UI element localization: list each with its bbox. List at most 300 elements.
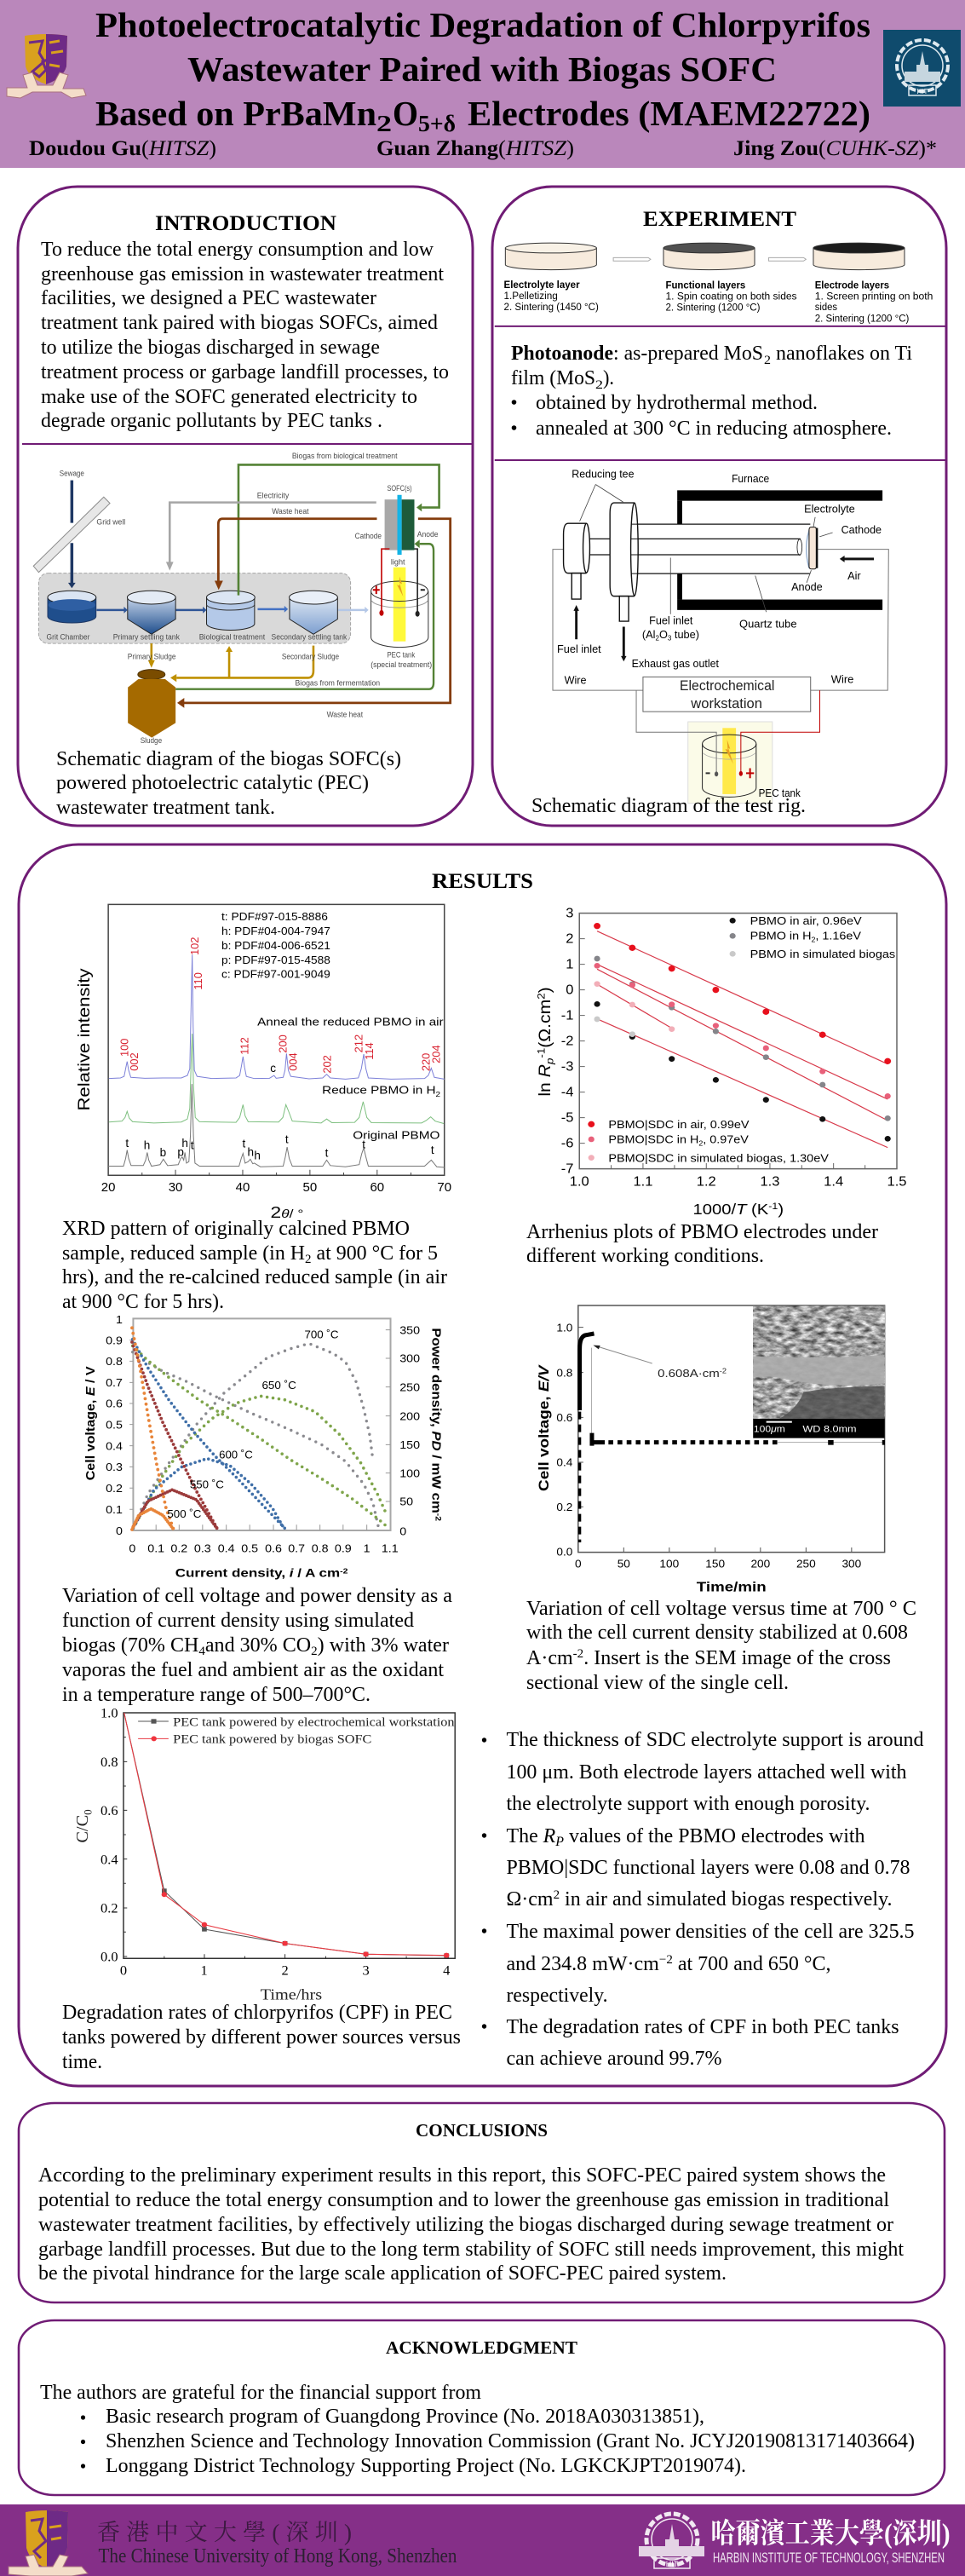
axis labels: 0.8 [556, 1367, 572, 1379]
chart: cell voltage versus time: 150 [705, 1558, 725, 1570]
axis labels: 70 [437, 1180, 451, 1195]
icon: HIT logo footer [639, 2514, 704, 2568]
caption: test rig: Schematic diagram of the test rig. [531, 795, 806, 817]
bottom axis labels: 0.5 [241, 1542, 258, 1555]
axis labels: 0.6 [556, 1411, 572, 1424]
title: Wastewater Paired with Biogas SOFC [187, 49, 777, 89]
phase letters: t [125, 1137, 129, 1150]
legend: upper: 2 [812, 936, 816, 943]
axis labels: 0.6 [101, 1804, 118, 1818]
rig labels: Reducing tee [572, 468, 635, 481]
step text: electrolyte layer: Electrolyte layer [504, 280, 580, 291]
legend: PEC tank powered by electrochemical workstation [173, 1715, 455, 1729]
text block: conclusions: garbage landfill processes. But due to the long term stability of SOFC still needs improvement, this might [38, 2239, 904, 2261]
text block: photoanode: 2 [764, 354, 771, 367]
legend: upper: PBMO in air, 0.96eV [750, 914, 862, 927]
rig labels: O [659, 629, 668, 642]
diagram labels: Cathode [355, 532, 382, 540]
caption: degradation rates: tanks powered by different power sources versus [62, 2026, 461, 2049]
phase letters [125, 1062, 434, 1162]
chart: Arrhenius plots: 1.0 [570, 1175, 589, 1189]
rig labels: Fuel inlet [649, 614, 693, 627]
diagram labels: (special treatment) [370, 660, 432, 669]
caption: degradation rates: time. [62, 2051, 102, 2073]
bottom axis labels: 0.4 [218, 1542, 235, 1555]
diagram labels: Waste heat [327, 711, 364, 719]
text block: results bullet list: 100 μm. Both electrode layers attached well with [506, 1761, 906, 1784]
caption: schematic diagram of PEC system: wastewater treatment tank. [56, 797, 275, 819]
axis title: cell voltage: Cell voltage, E/V [537, 1364, 552, 1491]
series: PBMO in air [594, 1001, 891, 1142]
curves: 550 C [132, 1342, 218, 1530]
sludge tank [128, 670, 175, 738]
author: Guan Zhang [376, 137, 574, 160]
left axis labels: 0.2 [106, 1481, 123, 1495]
chart: degradation rates: 3 [362, 1964, 370, 1978]
chart: cell voltage versus time: 300 [842, 1558, 861, 1570]
text block: photoanode: film (MoS [511, 367, 595, 389]
temperature labels: 550 ˚C [190, 1478, 224, 1491]
bottom axis labels: 1.1 [382, 1542, 399, 1555]
author: Guan Zhang: (HITSZ) [498, 137, 574, 160]
step text: electrolyte layer: 2. Sintering (1450 °C) [504, 303, 599, 314]
text block: photoanode: ). [603, 367, 614, 389]
text block: results bullet list: the electrolyte support with enough porosity. [506, 1793, 870, 1815]
left axis labels [106, 1312, 123, 1537]
electrochemical workstation [643, 677, 811, 712]
axis title: cell voltage: Cell voltage, E / V [84, 1366, 98, 1480]
panel: conclusions [19, 2103, 945, 2302]
text block: results bullet list: 2 [554, 1888, 560, 1902]
axis labels: 0.4 [556, 1456, 572, 1469]
legend: upper: PBMO in simulated biogas [750, 948, 895, 960]
heading: acknowledgment: ACKNOWLEDGMENT [386, 2337, 577, 2358]
PEC tank schematic [636, 690, 819, 804]
axis labels: 0 [566, 983, 574, 998]
text block: introduction: make use of the SOFC generated electricity to [41, 386, 417, 408]
text: CUHK Shenzhen English name: The Chinese University of Hong Kong, Shenzhen [99, 2545, 457, 2567]
temperature labels: 650 ˚C [261, 1379, 296, 1392]
chart: Arrhenius plots: 1.1 [633, 1175, 653, 1189]
bottom axis labels: 0.9 [335, 1542, 352, 1555]
text block: conclusions: According to the preliminary experiment results in this report, this SOFC-PEC paired system shows the [38, 2164, 886, 2187]
caption: cell voltage and power density: vaporas the fuel and ambient air as the oxidant [62, 1659, 444, 1681]
chart: Arrhenius plots: 1.4 [824, 1175, 843, 1189]
curves: 500 C [132, 1328, 174, 1530]
caption: XRD pattern: at 900 °C for 5 hrs). [62, 1291, 224, 1313]
right axis labels: 350 [399, 1323, 420, 1336]
curve: original [108, 1084, 445, 1167]
temperature labels: 600 ˚C [219, 1449, 253, 1461]
axis title: C/C0: C/C [74, 1818, 92, 1843]
caption: XRD pattern [62, 1218, 447, 1313]
diagram labels: SOFC(s) [388, 484, 412, 493]
step text: functional layers: 1. Spin coating on both sides [666, 291, 797, 303]
chart: degradation rates: 1 [201, 1964, 208, 1978]
left axis labels: 1 [116, 1312, 123, 1326]
text block: results bullet list: Ω·cm [506, 1888, 554, 1910]
caption: XRD pattern: XRD pattern of originally calcined PBMO [62, 1218, 410, 1240]
axis labels: 1.0 [101, 1707, 118, 1721]
red peak indices: 220 [420, 1053, 433, 1071]
phase letters: t [243, 1138, 246, 1150]
text block: results bullet list: respectively. [506, 1985, 608, 2007]
temperature labels [167, 1328, 339, 1520]
rig labels: Wire [831, 673, 853, 686]
text block: results bullet list: The thickness of SDC electrolyte support is around [506, 1729, 923, 1751]
text block: results bullet list [482, 1729, 923, 2070]
series: PBMO in hydrogen [594, 956, 891, 1121]
axis title: 1000/T: -1 [768, 1202, 778, 1212]
legend: PDF cards: c: PDF#97-001-9049 [221, 967, 330, 980]
series: electrochemical workstation [124, 1713, 449, 1958]
step text: electrode layers: 2. Sintering (1200 °C) [815, 314, 909, 325]
panel: results [19, 844, 946, 2086]
red peak indices: 110 [192, 972, 204, 990]
axis title: 1000/T: 1000/T (K [692, 1202, 767, 1218]
series: PBMO in biogas [594, 1017, 635, 1037]
caption: XRD pattern: at 900 °C for 5 [312, 1242, 438, 1265]
PEC tank [371, 549, 428, 648]
axis title: power density: -2 [434, 1513, 443, 1521]
disc: electrolyte layer [505, 243, 596, 270]
curve labels [257, 1016, 444, 1141]
legend: lower: , 0.97eV [703, 1133, 749, 1146]
caption: cell voltage versus time: Variation of cell voltage versus time at 700 ° C [526, 1598, 916, 1620]
text block: introduction: greenhouse gas emission in wastewater treatment [41, 263, 444, 285]
caption: XRD pattern: hrs), and the re-calcined reduced sample (in air [62, 1266, 447, 1288]
icon: CUHK crest footer [9, 2510, 88, 2576]
red peak indices [118, 937, 442, 1074]
axis labels: 3 [566, 907, 574, 921]
axis title: relative intensity: Relative intensity [76, 968, 94, 1111]
axis labels: 40 [236, 1180, 250, 1195]
text block: photoanode: : as-prepared MoS [613, 343, 763, 365]
text block: acknowledgment [40, 2382, 915, 2477]
caption: cell voltage and power density: function of current density using simulated [62, 1610, 414, 1632]
chart: degradation rates: 4 [443, 1964, 450, 1978]
legend: lower: PBMO|SDC in air, 0.99eV [608, 1118, 750, 1131]
diagram labels [47, 452, 439, 745]
header banner [0, 0, 965, 168]
diagram labels: Sludge [141, 736, 163, 745]
caption: cell voltage and power density: Variation of cell voltage and power density as a [62, 1585, 452, 1607]
caption: cell voltage and power density [62, 1585, 452, 1706]
legend: PDF cards [221, 910, 330, 980]
inset: SEM image: WD 8.0mm [802, 1424, 857, 1435]
electrochemical workstation: Electrochemical [680, 678, 774, 694]
arrow: step two to three [769, 257, 806, 261]
red peak indices: 002 [128, 1052, 141, 1071]
axis title: 1000/T: ) [778, 1202, 784, 1218]
heading: experiment: EXPERIMENT [643, 208, 796, 231]
text block: results bullet list: can achieve around 99.7% [506, 2048, 722, 2070]
arrow: step one to two [613, 257, 651, 261]
grit chamber tank [48, 591, 96, 623]
author: Jing Zou: (CUHK-SZ)* [819, 137, 937, 160]
red peak indices: 102 [188, 937, 201, 955]
text block: conclusions [38, 2164, 904, 2285]
text block: results bullet list: at 700 and 650 °C, [673, 1953, 831, 1975]
phase letters: p [177, 1146, 184, 1159]
phase letters: t [325, 1146, 329, 1159]
step text: electrode layers: Electrode layers [815, 281, 889, 291]
axis title: ln Rp: 2 [536, 993, 548, 1000]
arrow: biogas from biological treatment [238, 464, 439, 596]
series: biogas SOFC [124, 1713, 449, 1958]
chart: XRD pattern [76, 904, 451, 1221]
rig labels: Furnace [732, 473, 769, 485]
legend: PEC tank powered by biogas SOFC [173, 1732, 371, 1747]
chart: degradation rates: 0 [120, 1964, 127, 1978]
axis labels: -7 [561, 1162, 574, 1176]
rig labels: 3 [668, 634, 671, 643]
caption: cell voltage and power density: and 30% CO [205, 1634, 311, 1657]
text block: results bullet list: The maximal power densities of the cell are 325.5 [506, 1921, 915, 1943]
author: Doudou Gu [29, 137, 216, 160]
heading: results: RESULTS [432, 870, 533, 893]
axis labels: -6 [561, 1137, 574, 1150]
curve: reduced [109, 1034, 444, 1124]
author: Guan Zhang: Guan Zhang [376, 137, 499, 160]
curves: 650 C [133, 1346, 388, 1528]
diagram labels: Electricity [257, 492, 290, 500]
chart: Arrhenius plots [536, 907, 907, 1218]
title: 2 [376, 111, 392, 136]
step text: functional layers: 2. Sintering (1200 °C) [666, 303, 760, 314]
caption: cell voltage and power density: ) with 3% water [318, 1634, 449, 1657]
chart: degradation rates: 2 [282, 1964, 289, 1978]
temperature labels: 500 ˚C [167, 1507, 202, 1520]
curve labels: 2 [436, 1090, 440, 1098]
chart: cell voltage versus time: 100 [659, 1558, 679, 1570]
text block: introduction: treatment tank paired with biogas SOFCs, aimed [41, 312, 438, 334]
text block: introduction: facilities, we designed a PEC wastewater [41, 287, 376, 309]
step text: electrode layers [815, 281, 933, 325]
caption: cell voltage versus time: sectional view of the single cell. [526, 1672, 789, 1694]
rig labels: Anode [791, 581, 823, 594]
axis labels: -5 [561, 1111, 574, 1125]
legend: PDF cards: p: PDF#97-015-4588 [221, 954, 330, 966]
title: Based on PrBaMn [95, 94, 376, 133]
legend: upper [730, 914, 895, 960]
text block: results bullet list: P [554, 1835, 564, 1849]
inset: SEM image [753, 1306, 885, 1438]
text block: acknowledgment: Basic research program of Guangdong Province (No. 2018A030313851), [106, 2406, 704, 2428]
arrow: sewage inflow [71, 481, 73, 584]
axis title: two theta: 2θ/ ° [270, 1203, 303, 1221]
axis title: current density: Current density, i / A cm [175, 1567, 335, 1580]
quartz and alumina tubes [589, 524, 810, 573]
text block: introduction: degrade organic pollutants by PEC tanks . [41, 410, 382, 432]
chart: cell voltage versus time: 250 [796, 1558, 816, 1570]
chart: Arrhenius plots: 1.3 [760, 1175, 780, 1189]
caption: cell voltage and power density: 4 [198, 1645, 205, 1658]
bottom axis labels: 0.8 [312, 1542, 329, 1555]
axis labels: -3 [561, 1060, 574, 1074]
icon: HIT logo footer: HIT [666, 2560, 679, 2568]
curves: 600 C [133, 1340, 284, 1530]
rig labels: tube) [671, 629, 699, 642]
title [95, 5, 870, 136]
text: CUHK Shenzhen Chinese name: 香港中文大學(深圳) [97, 2520, 352, 2545]
caption: cell voltage versus time [526, 1598, 916, 1694]
icon: HIT logo [883, 30, 961, 107]
text block: conclusions: wastewater treatment facilities, by effectively utilizing the biogas discharged during sewage treatment or [38, 2214, 893, 2236]
single cell [807, 527, 818, 569]
caption: cell voltage versus time: . Insert is the SEM image of the cross [583, 1647, 891, 1669]
bottom axis labels: 0.1 [147, 1542, 164, 1555]
red peak indices: 004 [287, 1052, 300, 1071]
bottom axis labels [129, 1542, 399, 1555]
axis title: ln Rp: p [544, 1057, 556, 1065]
axis labels: -1 [561, 1009, 574, 1023]
axis labels [561, 907, 574, 1176]
caption: degradation rates: Degradation rates of chlorpyrifos (CPF) in PEC [62, 2002, 452, 2024]
title: 5+δ [418, 111, 456, 136]
diagram labels: PEC tank [388, 650, 416, 660]
left axis labels: 0.5 [106, 1418, 123, 1431]
diagram labels: Biogas from biological treatment [292, 452, 398, 460]
phase letters: c [270, 1062, 276, 1075]
right axis labels: 0 [399, 1524, 407, 1537]
title: O [393, 94, 418, 133]
bottom axis labels: 0.3 [194, 1542, 211, 1555]
phase letters: h [247, 1146, 254, 1159]
left axis labels: 0.3 [106, 1460, 123, 1473]
caption: schematic diagram of PEC system: powered photoelectric catalytic (PEC) [56, 772, 369, 794]
arrows: water flow between tanks [96, 606, 369, 614]
axis labels: 60 [370, 1180, 384, 1195]
axis labels [556, 1322, 572, 1559]
arrow: electricity [166, 503, 376, 571]
left axis labels: 0.6 [106, 1397, 123, 1410]
reducing tee two [610, 503, 638, 621]
phase letters: b [160, 1146, 166, 1159]
rig labels: Exhaust gas outlet [632, 658, 720, 671]
chart: cell voltage versus time [537, 1305, 885, 1594]
text block: photoanode: Photoanode [511, 343, 613, 365]
axis labels: -2 [561, 1034, 574, 1048]
series: PBMO SDC in biogas [594, 981, 675, 1032]
footer banner [0, 2504, 965, 2576]
phase letters: t [285, 1132, 289, 1145]
secondary settling tank [290, 591, 337, 634]
red peak indices: 202 [321, 1055, 334, 1074]
caption: degradation rates [62, 2002, 461, 2073]
text block: results bullet list: −2 [659, 1953, 673, 1967]
text block: results bullet list: The R [506, 1825, 555, 1847]
bottom axis labels: 0.7 [288, 1542, 305, 1555]
step text: functional layers: Functional layers [666, 281, 746, 291]
step text: electrolyte layer [504, 280, 599, 314]
caption: Arrhenius plots [526, 1221, 878, 1267]
text block: introduction: to utilize the biogas discharged in sewage [41, 337, 380, 359]
electrochemical workstation: workstation [690, 697, 762, 712]
diagram labels: Secondary settling tank [272, 633, 348, 642]
axis title: current density: -2 [340, 1567, 348, 1576]
diagram: biogas SOFC powered PEC wastewater treatment [33, 452, 451, 745]
rig labels: Fuel inlet [557, 643, 602, 655]
author: Jing Zou: Jing Zou [733, 137, 819, 160]
diagram labels: Biological treatment [199, 633, 266, 642]
caption: cell voltage and power density: biogas (70% CH [62, 1634, 198, 1657]
axis title: ln Rp: ) [536, 987, 554, 993]
caption: XRD pattern: 2 [305, 1253, 312, 1266]
axis title: C/C0: 0 [82, 1809, 95, 1815]
right axis labels: 250 [399, 1380, 420, 1393]
chart: cell voltage versus time: 50 [617, 1558, 630, 1570]
diagram labels: Waste heat [272, 507, 309, 516]
red peak indices: 112 [238, 1037, 250, 1055]
wire loop [553, 550, 888, 690]
red peak indices: 212 [353, 1034, 365, 1052]
diagram labels: Primary settling tank [113, 633, 181, 642]
phase letters: t [191, 1139, 194, 1152]
red peak indices: 114 [363, 1042, 376, 1060]
legend: PDF cards: b: PDF#04-006-6521 [221, 939, 330, 952]
text block: acknowledgment: Shenzhen Science and Technology Innovation Commission (Grant No. JCYJ20190813171403664) [106, 2430, 915, 2452]
title: Electrodes (MAEM22722) [468, 94, 870, 133]
rig labels: Quartz tube [739, 618, 797, 631]
author: Doudou Gu: (HITSZ) [141, 137, 216, 160]
red peak indices: 204 [429, 1045, 442, 1063]
phase letters: t [362, 1138, 365, 1150]
author: Doudou Gu: Doudou Gu [29, 137, 141, 160]
text block: results bullet list: values of the PBMO electrodes with [564, 1825, 865, 1847]
heading: introduction: INTRODUCTION [155, 212, 336, 235]
left axis labels: 0 [116, 1524, 123, 1537]
panel: introduction [18, 187, 473, 826]
callout: current density: 0.608A·cm [658, 1367, 715, 1380]
caption: Arrhenius plots: Arrhenius plots of PBMO electrodes under [526, 1221, 878, 1243]
diagram: test rig [553, 468, 888, 804]
arrow: biogas from fermentation [175, 539, 434, 689]
step text: functional layers [666, 281, 797, 314]
text block: results bullet list: The degradation rates of CPF in both PEC tanks [506, 2016, 899, 2038]
legend: lower: PBMO|SDC in H [608, 1133, 697, 1146]
SOFC stack [385, 495, 414, 555]
left axis labels: 0.1 [106, 1502, 123, 1516]
author: Jing Zou [733, 137, 937, 160]
furnace [677, 490, 882, 610]
axis labels: 0.0 [101, 1951, 118, 1964]
arrow: waste heat to sludge [177, 519, 451, 708]
axis title: time: Time/min [697, 1581, 767, 1594]
text block: photoanode: annealed at 300 °C in reducing atmosphere. [536, 418, 892, 440]
series: PBMO SDC in air [594, 923, 891, 1064]
caption: cell voltage and power density: in a temperature range of 500–700°C. [62, 1684, 370, 1706]
caption: schematic diagram of PEC system [56, 748, 401, 819]
text block: results bullet list: and 234.8 mW·cm [506, 1953, 659, 1975]
step text: electrode layers: sides [815, 303, 837, 314]
chart: degradation rates [74, 1707, 455, 2003]
phase letters: h [181, 1137, 188, 1150]
panel: experiment [492, 187, 946, 826]
arrows: gas flow [573, 556, 874, 661]
series: PBMO SDC in hydrogen [594, 963, 891, 1099]
axis title: power density: Power density, PD / mW cm [428, 1328, 443, 1503]
right axis labels: 300 [399, 1351, 420, 1365]
text block: introduction: To reduce the total energy consumption and low [41, 239, 434, 261]
legend: PDF cards: t: PDF#97-015-8886 [221, 910, 328, 923]
temperature labels: 700 ˚C [304, 1328, 339, 1341]
rig labels: Wire [565, 674, 587, 687]
axis labels [101, 1180, 451, 1195]
text block: results bullet list: PBMO|SDC functional layers were 0.08 and 0.78 [506, 1857, 910, 1879]
panel: acknowledgment [19, 2320, 945, 2495]
fabrication steps [495, 243, 945, 460]
